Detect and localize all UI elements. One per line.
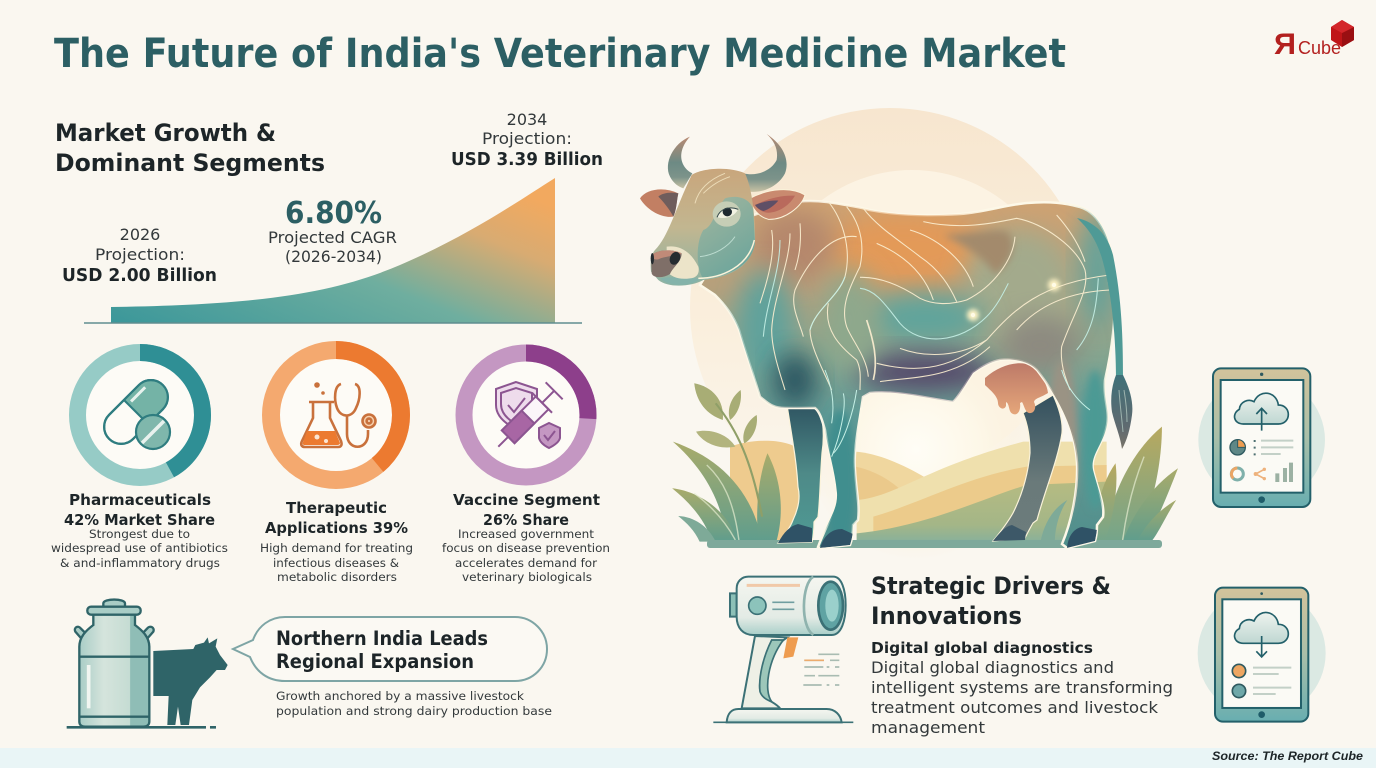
heading: market growth: Dominant Segments: [55, 149, 325, 177]
text: therapeutic: [260, 499, 413, 584]
hills: [730, 441, 1107, 543]
icon: cow silhouette: [153, 637, 228, 725]
icon: tablet download: [1198, 588, 1326, 722]
icon: capsule and tablet: [97, 373, 175, 451]
text: vaccine: Vaccine Segment: [453, 491, 600, 509]
source footer band: Source: The Report Cube: [1212, 749, 1363, 763]
icon: milk can and cow silhouette: [67, 600, 228, 727]
text: pharmaceuticals: 42% Market Share: [64, 511, 215, 529]
title: The Future of India's Veterinary Medicine Market: [54, 31, 1066, 77]
logo: RCube: Cube: [1298, 38, 1341, 58]
sun backdrop: [690, 108, 1090, 560]
icon: tablet upload: [1198, 368, 1325, 507]
cow ears and horns: [640, 134, 805, 219]
text: digital diagnostics: [871, 639, 1173, 737]
text: therapeutic: Applications 39%: [265, 519, 408, 537]
right grass: [1041, 427, 1178, 542]
icon: shield and syringe: [488, 381, 564, 457]
scanner head: [730, 593, 737, 617]
callout: 2026 projection: 2026: [120, 225, 160, 244]
text: therapeutic: infectious diseases &: [273, 556, 399, 570]
text: vaccine: [442, 491, 610, 584]
text: therapeutic: Therapeutic: [286, 499, 387, 517]
icon: milk can: [75, 600, 154, 727]
callout: CAGR: [268, 196, 397, 266]
text: northern india detail: [276, 689, 552, 718]
tail: [1077, 218, 1132, 449]
text: northern india detail: Growth anchored by a massive livestock: [276, 689, 524, 703]
text: vaccine: Increased government: [458, 527, 595, 541]
text: pharmaceuticals: Pharmaceuticals: [69, 491, 211, 509]
heading: market growth: Market Growth &: [55, 119, 276, 147]
text: vaccine: veterinary biologicals: [462, 570, 592, 584]
callout: northern india speech bubble: Northern India Leads: [276, 627, 488, 650]
scanner base: [727, 709, 842, 722]
glowing sparkles: [967, 279, 1060, 321]
text: pharmaceuticals: widespread use of antibiotics: [51, 541, 228, 555]
illustration: cow in landscape: [640, 134, 1178, 550]
text: northern india detail: population and strong dairy production base: [276, 704, 552, 718]
heading: strategic drivers: Strategic Drivers &: [871, 572, 1111, 600]
text: therapeutic: metabolic disorders: [277, 570, 397, 584]
text: vaccine: focus on disease prevention: [442, 541, 610, 555]
scanner grip: [742, 636, 787, 708]
scanner data lines: [803, 654, 839, 685]
ground strip: [707, 540, 1162, 548]
text: therapeutic: High demand for treating: [260, 541, 413, 555]
callout: CAGR: 6.80%: [285, 196, 382, 231]
heading: market growth: [55, 119, 325, 177]
callout: 2034 projection: [451, 110, 603, 170]
area chart: market growth curve: [84, 178, 582, 323]
callout: CAGR: (2026-2034): [285, 247, 382, 266]
cow head: [651, 169, 755, 286]
text: digital diagnostics: treatment outcomes and livestock: [871, 698, 1159, 717]
callout: 2034 projection: Projection:: [482, 129, 572, 148]
text: vaccine: 26% Share: [483, 511, 569, 529]
text: digital diagnostics: intelligent systems are transforming: [871, 678, 1173, 697]
text: pharmaceuticals: Strongest due to: [89, 527, 190, 541]
text: vaccine: accelerates demand for: [455, 556, 597, 570]
heading: strategic drivers: [871, 572, 1111, 630]
cow shading: [737, 202, 1116, 550]
callout: 2026 projection: USD 2.00 Billion: [62, 266, 217, 286]
energy flow lines: [760, 202, 1110, 390]
callout: 2034 projection: USD 3.39 Billion: [451, 150, 603, 170]
logo: RCube: Я: [1274, 28, 1296, 61]
callout: 2026 projection: Projection:: [95, 245, 185, 264]
callout: 2026 projection: [62, 225, 217, 286]
logo: RCube: [1274, 20, 1354, 61]
udder: [985, 363, 1048, 414]
text: digital diagnostics: Digital global diagnostics: [871, 639, 1093, 657]
text: pharmaceuticals: & and-inflammatory drugs: [60, 556, 220, 570]
text: pharmaceuticals: [51, 491, 228, 570]
callout: 2034 projection: 2034: [507, 110, 547, 129]
source footer band: [0, 748, 1376, 768]
donut: vaccine segment 26%: [464, 353, 588, 477]
callout: northern india speech bubble: [233, 617, 547, 681]
leg lines: [825, 370, 1090, 457]
icon: flask and stethoscope: [301, 382, 376, 447]
cyan flow lines: [763, 240, 1098, 350]
text: digital diagnostics: Digital global diagnostics and: [871, 658, 1114, 677]
far legs: [778, 395, 1062, 543]
text: digital diagnostics: management: [871, 718, 985, 737]
callout: northern india speech bubble: Regional Expansion: [276, 650, 474, 673]
cow body: [700, 201, 1115, 548]
heading: strategic drivers: Innovations: [871, 602, 1022, 630]
icon: diagnostic scanner: [713, 577, 853, 722]
donut: therapeutic applications 39%: [271, 350, 401, 480]
left grass: [672, 383, 781, 542]
donut: pharmaceuticals 42%: [78, 352, 202, 478]
callout: CAGR: Projected CAGR: [268, 228, 397, 247]
icons: tablets: [1198, 368, 1326, 722]
